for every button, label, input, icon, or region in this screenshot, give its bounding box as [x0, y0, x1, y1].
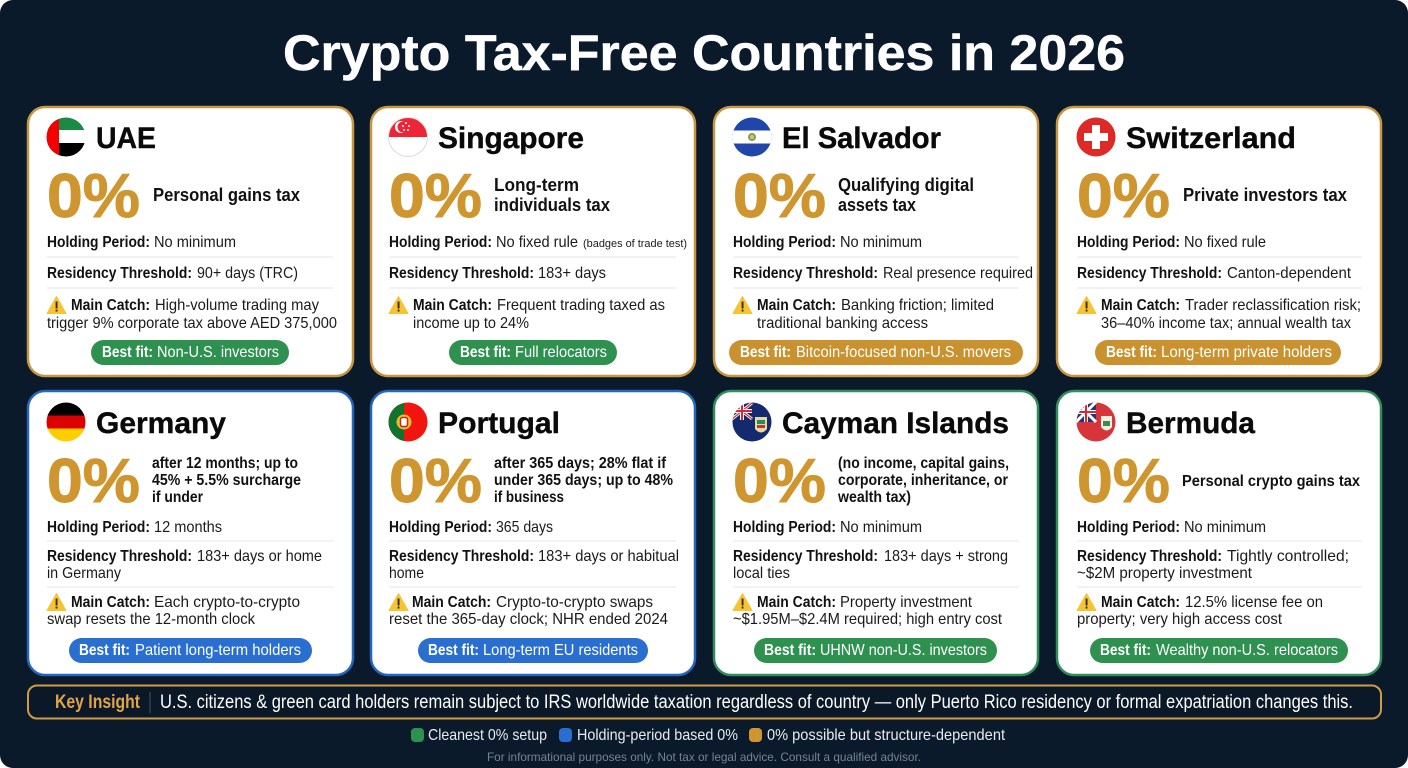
main catch: High-volume trading may [155, 297, 319, 314]
main catch [47, 296, 337, 332]
holding period: Holding Period: [47, 234, 150, 251]
rate description: corporate, inheritance, or [838, 472, 1008, 489]
icon: Bermuda flag [1076, 402, 1116, 442]
residency threshold [733, 548, 1008, 582]
rate description: Personal gains tax [153, 185, 300, 205]
legend: holding-period: Holding-period based 0% [577, 727, 738, 744]
holding period [733, 519, 922, 536]
country name: Portugal [438, 407, 560, 440]
country name: Switzerland [1126, 122, 1296, 155]
main catch: 12.5% license fee on [1185, 594, 1323, 611]
holding period: No fixed rule [496, 234, 578, 251]
residency threshold: 183+ days [538, 265, 606, 282]
holding period: No minimum [840, 519, 922, 536]
country name: Singapore [438, 122, 584, 155]
rate description [494, 175, 610, 215]
rate description: if under [152, 489, 203, 506]
main catch: 36–40% income tax; annual wealth tax [1101, 315, 1351, 332]
main catch [47, 594, 300, 628]
title: Crypto Tax-Free Countries in 2026 [283, 25, 1125, 81]
residency threshold [1077, 548, 1349, 582]
main catch: Main Catch: [71, 594, 150, 611]
best fit pill [1090, 638, 1348, 663]
residency threshold: Tightly controlled; [1227, 548, 1349, 565]
main catch: Trader reclassification risk; [1185, 297, 1361, 314]
rate description: wealth tax) [837, 489, 911, 506]
country name: El Salvador [782, 122, 941, 155]
main catch: Crypto-to-crypto swaps [496, 594, 653, 611]
main catch: swap resets the 12-month clock [47, 611, 256, 628]
rate description: assets tax [838, 195, 916, 215]
holding period [389, 234, 687, 251]
rate description [838, 175, 974, 215]
holding period: (badges of trade test) [583, 238, 687, 250]
holding period: 365 days [496, 519, 553, 536]
residency threshold: Canton-dependent [1227, 265, 1352, 282]
main catch: Frequent trading taxed as [497, 297, 665, 314]
main catch [1077, 594, 1323, 628]
rate description: (no income, capital gains, [838, 455, 1009, 472]
main catch: traditional banking access [757, 315, 928, 332]
best fit pill: Long-term private holders [1161, 344, 1332, 361]
rate description [837, 455, 1009, 506]
0% figure: 0% [733, 162, 826, 231]
country name: Bermuda [1126, 407, 1255, 440]
icon: UAE flag [46, 117, 86, 157]
residency threshold [389, 548, 679, 582]
main catch [733, 594, 1003, 628]
residency threshold: home [389, 565, 424, 582]
main catch: Property investment [840, 594, 973, 611]
0% figure: 0% [47, 447, 140, 516]
holding period: Holding Period: [733, 519, 836, 536]
rate description: 45% + 5.5% surcharge [152, 472, 301, 489]
key insight bar [28, 686, 1381, 718]
holding period: Holding Period: [389, 234, 492, 251]
residency threshold: Residency Threshold: [733, 265, 878, 282]
best fit pill: Best fit: [1106, 344, 1157, 361]
holding period: Holding Period: [47, 519, 150, 536]
main catch [1077, 296, 1361, 332]
rate description [494, 455, 673, 506]
main catch: Main Catch: [1101, 594, 1180, 611]
main catch: income up to 24% [413, 315, 529, 332]
holding period: Holding Period: [1077, 234, 1180, 251]
residency threshold: Residency Threshold: [1077, 548, 1222, 565]
rate description: Long-term [494, 175, 579, 195]
main catch [389, 594, 668, 628]
best fit pill [1095, 340, 1341, 365]
panel: El Salvador [714, 107, 1038, 376]
icon: Germany flag [46, 402, 86, 442]
residency threshold [47, 265, 298, 282]
main catch: Main Catch: [757, 297, 836, 314]
best fit pill: Full relocators [515, 344, 607, 361]
best fit pill: Non-U.S. investors [157, 344, 279, 361]
holding period [733, 234, 922, 251]
residency threshold: Real presence required [883, 265, 1033, 282]
rate description: under 365 days; up to 48% [494, 472, 673, 489]
panel: UAE [28, 107, 353, 376]
best fit pill: Best fit: [460, 344, 511, 361]
main catch [733, 296, 994, 332]
best fit pill: UHNW non-U.S. investors [820, 642, 987, 659]
holding period: 12 months [154, 519, 222, 536]
rate description: if business [494, 489, 564, 506]
residency threshold: 183+ days or home [197, 548, 322, 565]
panel: Portugal [371, 391, 695, 675]
0% figure: 0% [1077, 162, 1170, 231]
main catch: Main Catch: [757, 594, 836, 611]
residency threshold: Residency Threshold: [1077, 265, 1222, 282]
residency threshold: 183+ days + strong [884, 548, 1008, 565]
main catch: Main Catch: [71, 297, 150, 314]
rate description: Private investors tax [1183, 185, 1347, 205]
holding period: Holding Period: [389, 519, 492, 536]
residency threshold [47, 548, 322, 582]
main catch: Each crypto-to-crypto [154, 594, 300, 611]
best fit pill: Wealthy non-U.S. relocators [1156, 642, 1338, 659]
main catch: ~$1.95M–$2.4M required; high entry cost [733, 611, 1003, 628]
main catch: Main Catch: [413, 297, 492, 314]
legend: structure-dependent: 0% possible but structure-dependent [767, 727, 1006, 744]
main catch: Main Catch: [412, 594, 491, 611]
panel: Switzerland [1057, 107, 1381, 376]
holding period [47, 519, 222, 536]
main catch [389, 296, 665, 332]
rate description: Qualifying digital [838, 175, 974, 195]
country name: Cayman Islands [782, 407, 1009, 440]
best fit pill: Best fit: [79, 642, 130, 659]
best fit pill [418, 638, 648, 663]
main catch: property; very high access cost [1077, 611, 1283, 628]
residency threshold: ~$2M property investment [1077, 565, 1253, 582]
best fit pill: Best fit: [1100, 642, 1151, 659]
best fit pill [729, 340, 1023, 365]
panel: Germany [28, 391, 353, 675]
key insight label: Key Insight [55, 692, 141, 713]
holding period: No fixed rule [1184, 234, 1266, 251]
rate description [152, 455, 301, 506]
legend: cleanest: Cleanest 0% setup [428, 727, 547, 744]
panel: Bermuda [1057, 391, 1381, 675]
best fit pill: Best fit: [428, 642, 479, 659]
best fit pill: Best fit: [102, 344, 153, 361]
holding period: No minimum [154, 234, 236, 251]
main catch: trigger 9% corporate tax above AED 375,000 [47, 315, 337, 332]
legend [411, 727, 1006, 744]
0% figure: 0% [733, 447, 826, 516]
0% figure: 0% [389, 447, 482, 516]
best fit pill [449, 340, 617, 365]
residency threshold: 90+ days (TRC) [197, 265, 298, 282]
residency threshold: Residency Threshold: [47, 548, 192, 565]
best fit pill: Best fit: [740, 344, 791, 361]
residency threshold [1077, 265, 1352, 282]
holding period: No minimum [840, 234, 922, 251]
residency threshold [733, 265, 1033, 282]
holding period: No minimum [1184, 519, 1266, 536]
rate description: after 12 months; up to [152, 455, 298, 472]
icon: Portugal flag [388, 402, 428, 442]
best fit pill: Best fit: [764, 642, 816, 659]
icon: El Salvador flag [732, 117, 772, 157]
holding period: Holding Period: [733, 234, 836, 251]
holding period: Holding Period: [1077, 519, 1180, 536]
country name: Germany [96, 407, 226, 440]
main catch: Banking friction; limited [841, 297, 994, 314]
best fit pill: Bitcoin-focused non-U.S. movers [796, 344, 1011, 361]
rate description: Personal crypto gains tax [1182, 473, 1360, 490]
holding period [47, 234, 236, 251]
residency threshold: in Germany [47, 565, 121, 582]
holding period [1077, 519, 1266, 536]
panel: Singapore [371, 107, 695, 376]
panel: Cayman Islands [714, 391, 1038, 675]
residency threshold: local ties [733, 565, 790, 582]
residency threshold: 183+ days or habitual [538, 548, 679, 565]
residency threshold: Residency Threshold: [47, 265, 192, 282]
best fit pill [91, 340, 289, 365]
holding period [1077, 234, 1266, 251]
icon: Switzerland flag [1076, 118, 1116, 156]
icon: Singapore flag [389, 118, 427, 137]
0% figure: 0% [1077, 447, 1170, 516]
residency threshold: Residency Threshold: [389, 265, 534, 282]
main catch: Main Catch: [1101, 297, 1180, 314]
main catch: reset the 365-day clock; NHR ended 2024 [389, 611, 668, 628]
rate description: individuals tax [494, 195, 610, 215]
0% figure: 0% [47, 162, 140, 231]
residency threshold: Residency Threshold: [733, 548, 878, 565]
icon: Cayman Islands flag [732, 402, 772, 442]
best fit pill [754, 638, 997, 663]
rate description: after 365 days; 28% flat if [494, 455, 667, 472]
best fit pill: Patient long-term holders [135, 642, 301, 659]
country name: UAE [96, 122, 156, 155]
residency threshold: Residency Threshold: [389, 548, 534, 565]
disclaimer: For informational purposes only. Not tax or legal advice. Consult a qualified advisor. [487, 750, 921, 764]
0% figure: 0% [389, 162, 482, 231]
best fit pill: Long-term EU residents [483, 642, 638, 659]
best fit pill [69, 638, 312, 663]
